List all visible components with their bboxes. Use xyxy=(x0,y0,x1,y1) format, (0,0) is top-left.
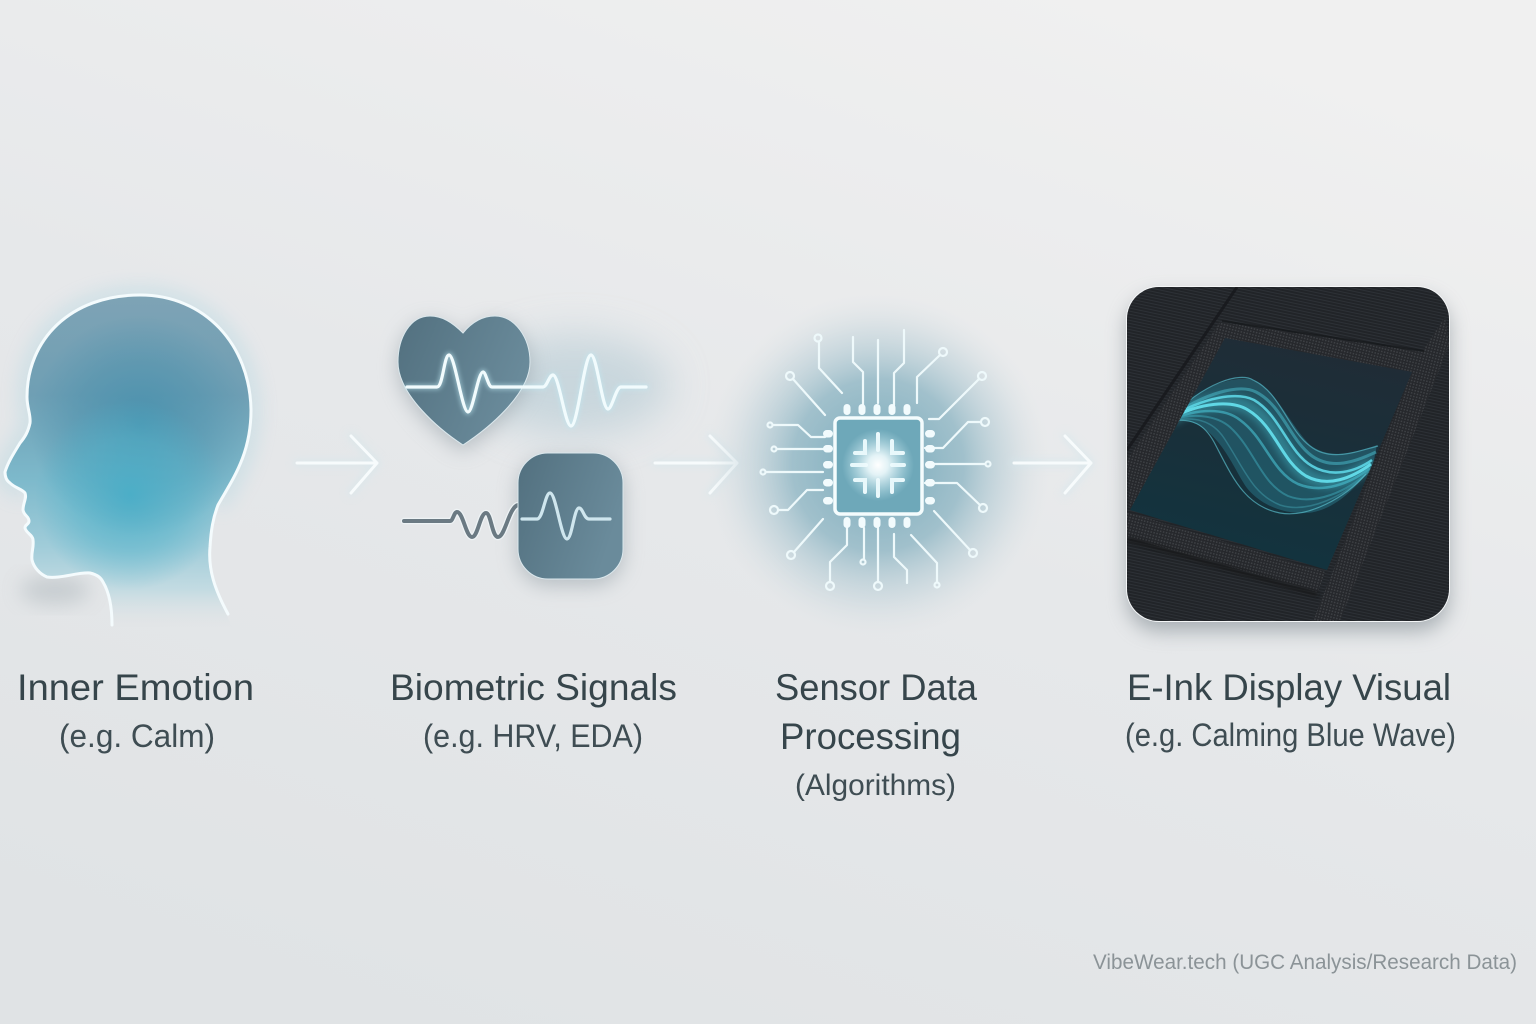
heart shape xyxy=(398,316,530,445)
head lower glow xyxy=(5,295,251,627)
calming blue wave xyxy=(1170,377,1378,514)
arrow: biometrics to processing xyxy=(655,436,737,493)
label: sensor data processing: Processing xyxy=(780,716,961,757)
left strap xyxy=(1127,322,1225,510)
label: biometric signals: (e.g. HRV, EDA) xyxy=(423,718,643,754)
label: inner emotion: (e.g. Calm) xyxy=(59,718,215,754)
right strap xyxy=(1313,317,1449,621)
circuit traces xyxy=(760,330,990,590)
wave body xyxy=(1170,379,1377,513)
chip body xyxy=(835,418,922,514)
pad ECG xyxy=(522,493,610,539)
bottom strap xyxy=(1127,512,1325,592)
top strap xyxy=(1220,322,1422,372)
arrow: emotion to biometrics xyxy=(297,436,377,493)
icon: head silhouette (inner emotion) xyxy=(5,295,251,627)
chip pads xyxy=(823,404,935,528)
ECG trace xyxy=(407,355,646,426)
label: inner emotion: Inner Emotion xyxy=(17,667,254,708)
head upper shading xyxy=(5,295,251,560)
icon: e-ink display on fabric xyxy=(1126,286,1450,631)
icon: processor chip xyxy=(706,293,1050,637)
label: sensor data processing: Sensor Data xyxy=(775,667,977,708)
label: e-ink display visual xyxy=(1125,667,1456,753)
arrow: processing to display xyxy=(1014,436,1091,493)
screen xyxy=(1130,338,1412,570)
pad xyxy=(518,453,623,579)
chip core light xyxy=(842,429,914,501)
label: sensor data processing xyxy=(775,667,977,802)
label: sensor data processing: (Algorithms) xyxy=(795,769,956,802)
head outline xyxy=(5,295,251,625)
label: e-ink display visual: (e.g. Calming Blue Wave) xyxy=(1125,717,1456,753)
label: biometric signals: Biometric Signals xyxy=(390,667,677,708)
label: biometric signals xyxy=(390,667,677,754)
head fill xyxy=(5,295,251,627)
icon: sensor pad with signal xyxy=(404,453,623,585)
icon: heart with ECG xyxy=(398,316,670,451)
label: inner emotion xyxy=(17,667,254,754)
fabric card xyxy=(1127,287,1449,621)
wave glow xyxy=(1170,402,1372,481)
source credit: VibeWear.tech (UGC Analysis/Research Data) xyxy=(1093,951,1517,974)
chip core glyph xyxy=(852,434,904,496)
input wave xyxy=(404,505,518,537)
label: e-ink display visual: E-Ink Display Visual xyxy=(1127,667,1451,708)
